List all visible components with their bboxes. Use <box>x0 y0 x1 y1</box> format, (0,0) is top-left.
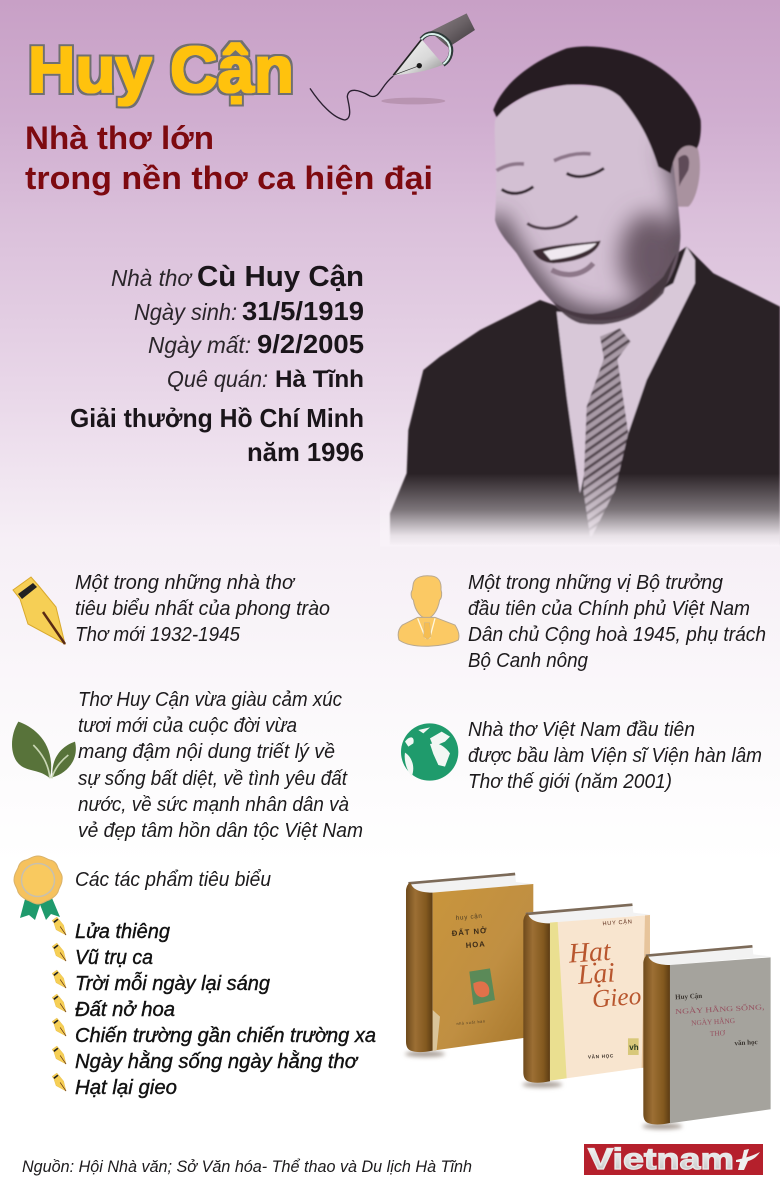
biographical details <box>70 261 364 467</box>
list of works: Vũ trụ ca <box>75 946 153 969</box>
biographical details: Hà Tĩnh <box>275 366 364 393</box>
book: Ngày hằng sống ngày hằng thơ: NGÀY HẰNG SỐNG, <box>675 1001 765 1016</box>
subtitle <box>25 120 433 196</box>
list of works: Chiến trường gần chiến trường xa <box>75 1024 376 1047</box>
list of works: Lửa thiêng <box>75 920 171 943</box>
text: poetry description: nước, về sức mạnh nhân dân và <box>78 794 349 816</box>
book: Hạt lại gieo <box>522 903 651 1088</box>
text: Thơ mới movement: Thơ mới 1932-1945 <box>75 624 241 646</box>
book: Hạt lại gieo: VĂN HỌC <box>588 1052 614 1060</box>
source line: Nguồn: Hội Nhà văn; Sở Văn hóa- Thể thao và Du lịch Hà Tĩnh <box>22 1157 472 1176</box>
subtitle: Nhà thơ lớn <box>25 120 214 156</box>
text: Thơ mới movement: Một trong những nhà thơ <box>75 572 296 594</box>
text: world poetry academy <box>468 719 762 793</box>
list of works: Hạt lại gieo <box>75 1076 177 1099</box>
logo: Vietnam+: Vietnam <box>588 1143 734 1176</box>
biographical details: Ngày sinh: <box>134 299 237 325</box>
bullet nibs <box>52 917 66 1091</box>
icon: businessman silhouette <box>398 576 459 646</box>
list of works <box>52 917 376 1099</box>
text: poetry description: tươi mới của cuộc đời vừa <box>78 715 297 737</box>
biographical details: Cù Huy Cận <box>197 261 364 293</box>
list of works: Đất nở hoa <box>75 998 175 1021</box>
portrait photo of Huy Cận <box>380 46 780 547</box>
biographical details: 31/5/1919 <box>242 296 364 326</box>
book: Hạt lại gieo: Gieo <box>591 982 642 1013</box>
heading: representative works: Các tác phẩm tiêu biểu <box>75 869 271 891</box>
book: Đất nở hoa: nhà xuất bản <box>456 1019 486 1026</box>
icon: fountain pen with ink line <box>310 13 475 120</box>
title: Huy Cận <box>28 33 294 106</box>
text: minister <box>468 572 766 672</box>
book: Hạt lại gieo: HUY CẬN <box>602 918 633 927</box>
book: Hạt lại gieo: vh <box>629 1043 639 1052</box>
icon: award medal <box>14 856 62 920</box>
text: Thơ mới movement: tiêu biểu nhất của phong trào <box>75 598 330 620</box>
text: Thơ mới movement <box>75 572 330 646</box>
icon: green globe <box>401 723 458 781</box>
book: Ngày hằng sống ngày hằng thơ: THƠ <box>710 1028 726 1038</box>
biographical details: Giải thưởng Hồ Chí Minh <box>70 403 364 433</box>
text: minister: đầu tiên của Chính phủ Việt Nam <box>468 598 750 620</box>
subtitle: trong nền thơ ca hiện đại <box>25 160 433 196</box>
text: poetry description: sự sống bất diệt, về tình yêu đất <box>78 768 348 790</box>
text: world poetry academy: được bầu làm Viện sĩ Viện hàn lâm <box>468 745 762 767</box>
book: Hạt lại gieo: Hạt <box>567 936 613 970</box>
book: Ngày hằng sống ngày hằng thơ: văn học <box>734 1038 758 1047</box>
logo: Vietnam+ <box>584 1143 763 1176</box>
text: world poetry academy: Nhà thơ Việt Nam đầu tiên <box>468 719 695 741</box>
list of works: Trời mỗi ngày lại sáng <box>75 972 271 995</box>
book: Đất nở hoa: huy cận <box>456 913 483 922</box>
book: Hạt lại gieo: Lại <box>576 957 616 991</box>
text: minister: Bộ Canh nông <box>468 650 588 672</box>
book: Ngày hằng sống ngày hằng thơ: NGÀY HẰNG <box>691 1015 736 1027</box>
text: poetry description: vẻ đẹp tâm hồn dân tộc Việt Nam <box>78 820 363 842</box>
book: Ngày hằng sống ngày hằng thơ <box>642 945 771 1129</box>
book: Ngày hằng sống ngày hằng thơ: Huy Cận <box>675 992 702 1001</box>
book: Đất nở hoa: HOA <box>465 939 486 950</box>
text: poetry description <box>78 689 363 842</box>
list of works: Ngày hằng sống ngày hằng thơ <box>75 1050 359 1073</box>
text: poetry description: Thơ Huy Cận vừa giàu cảm xúc <box>78 689 342 711</box>
book: Đất nở hoa: ĐẤT NỞ <box>451 925 488 938</box>
icon: gold pen nib <box>13 577 65 644</box>
text: poetry description: mang đậm nội dung triết lý về <box>78 741 335 763</box>
biographical details: Nhà thơ <box>111 265 193 291</box>
text: minister: Dân chủ Cộng hoà 1945, phụ trách <box>468 624 766 646</box>
biographical details: năm 1996 <box>247 437 364 467</box>
text: minister: Một trong những vị Bộ trưởng <box>468 572 723 594</box>
text: world poetry academy: Thơ thế giới (năm 2001) <box>468 771 672 793</box>
book: Đất nở hoa <box>405 873 533 1057</box>
icon: green leaves <box>12 722 76 778</box>
biographical details: Quê quán: <box>167 366 268 392</box>
biographical details: Ngày mất: <box>148 332 251 358</box>
biographical details: 9/2/2005 <box>257 329 364 359</box>
